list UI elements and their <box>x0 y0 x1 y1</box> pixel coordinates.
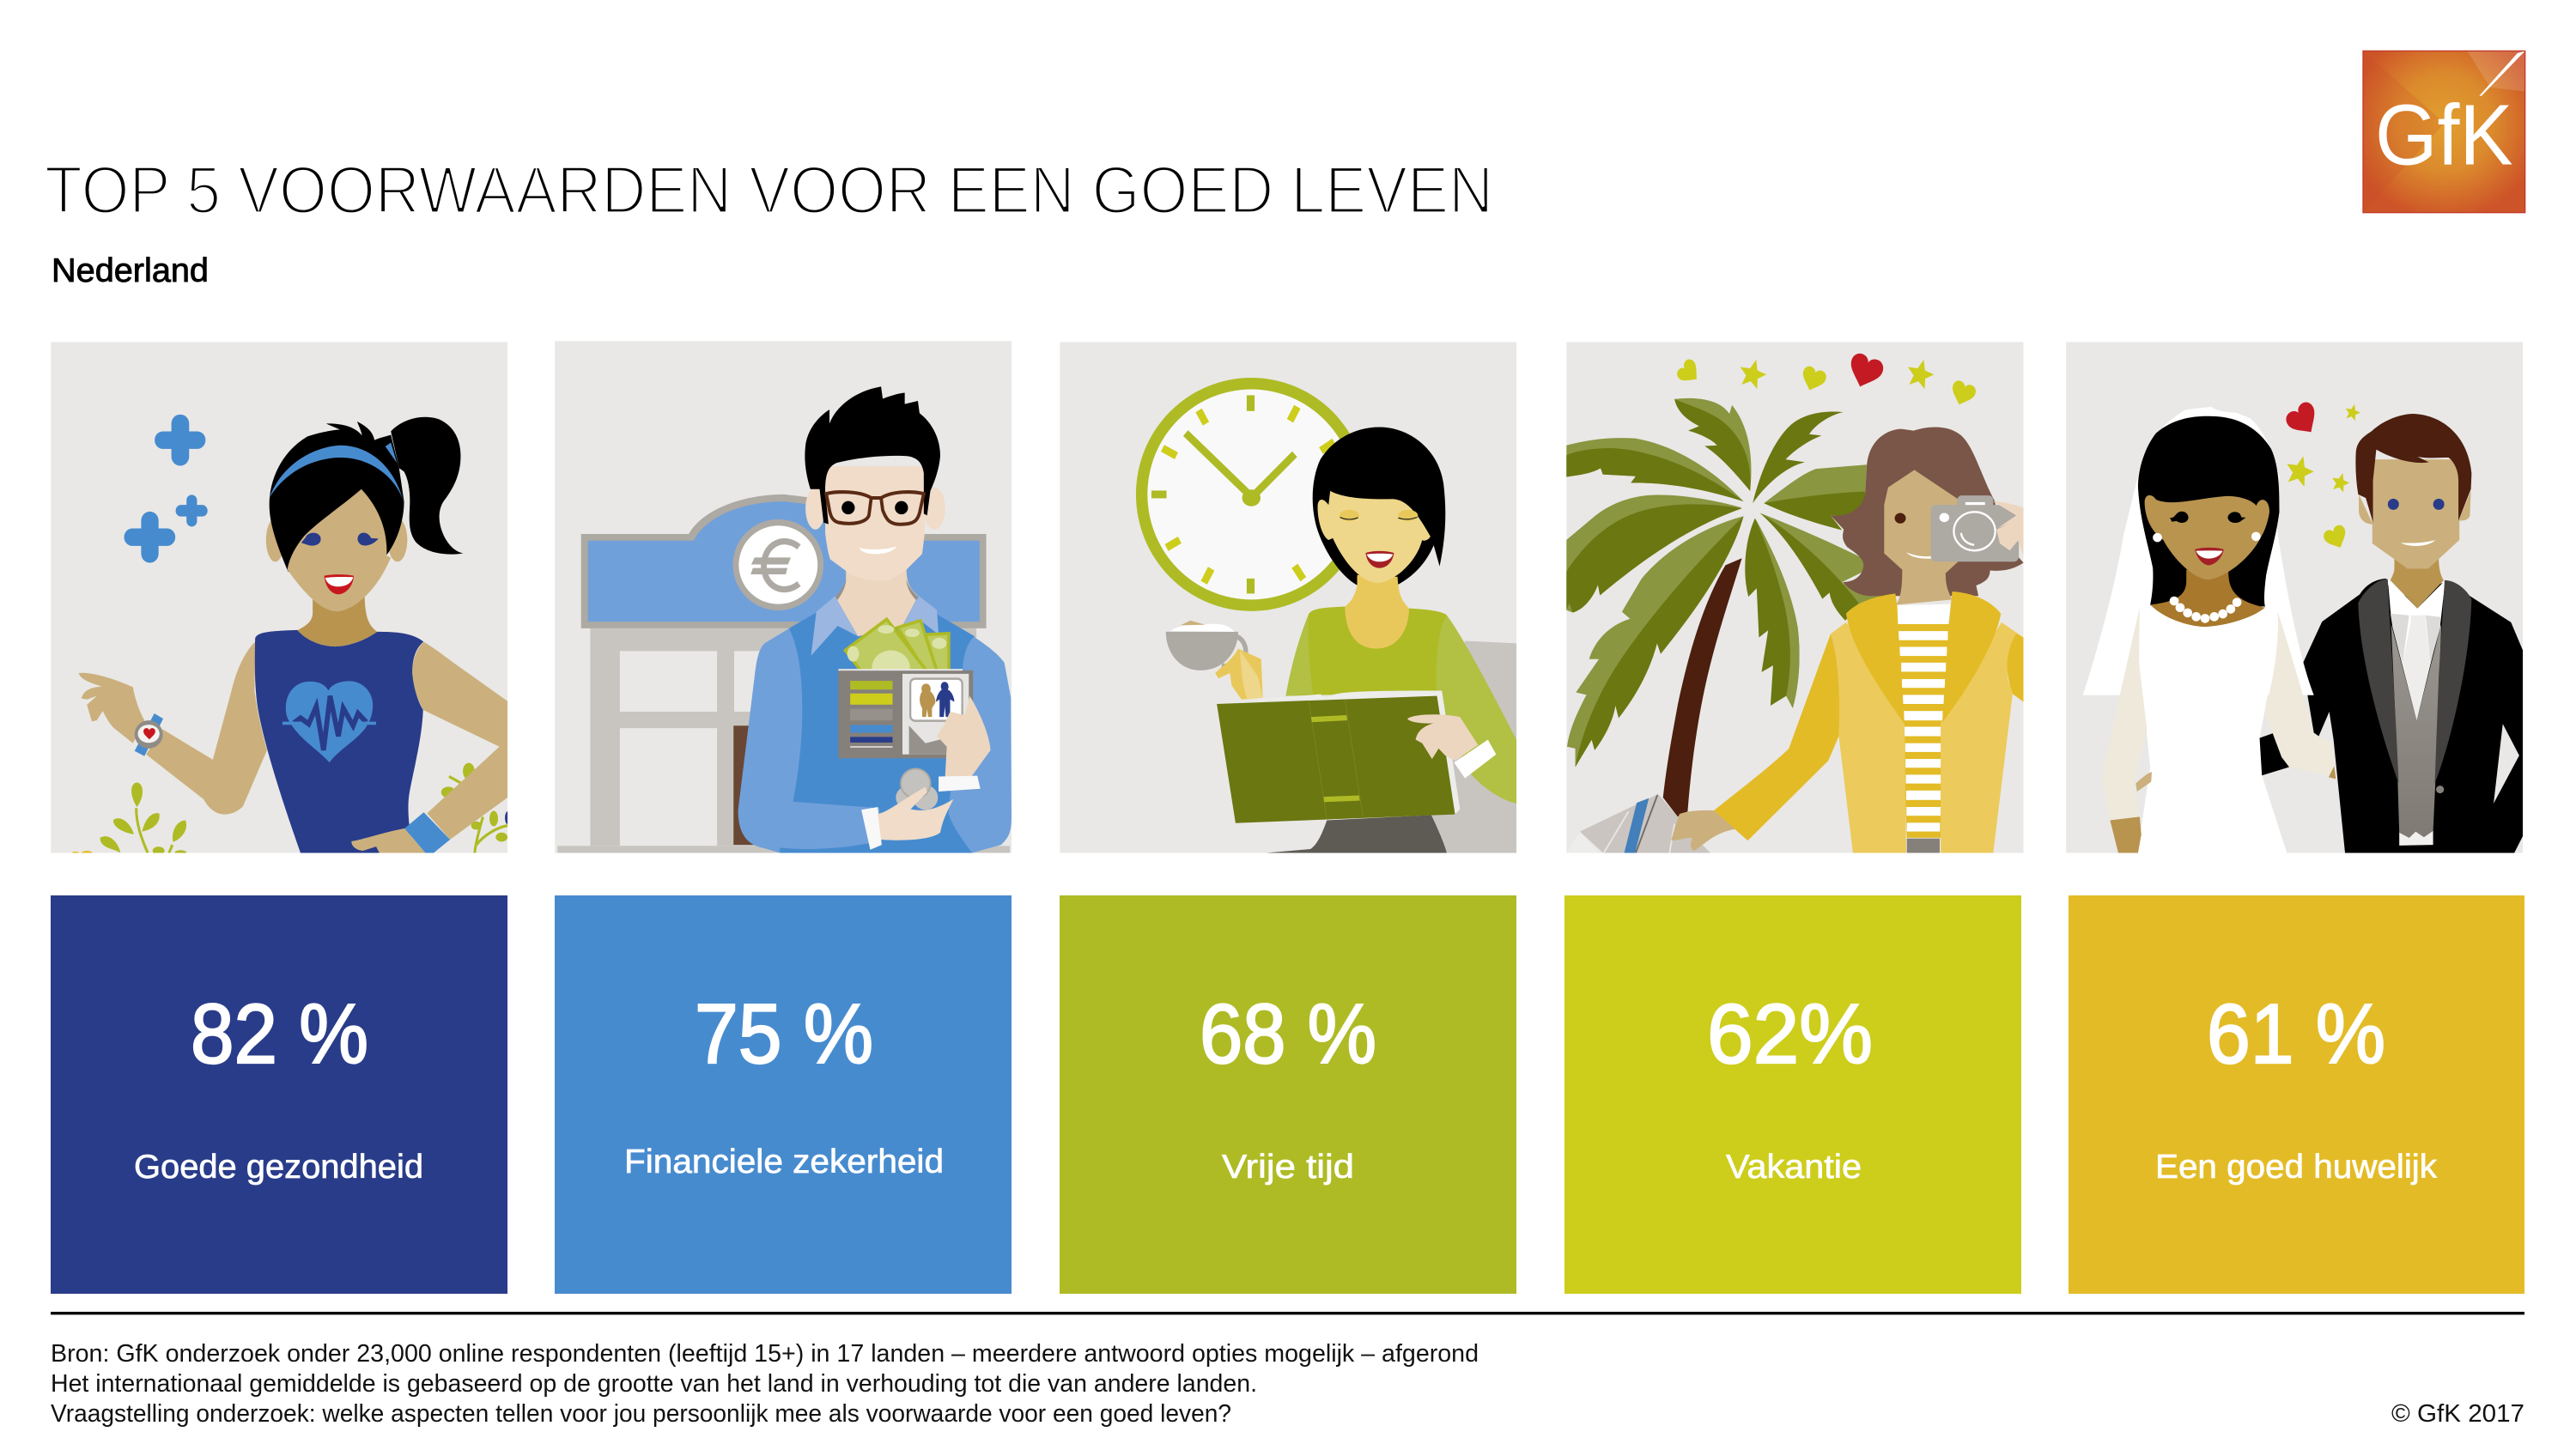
stat card: 62 percent <box>1564 895 2021 1294</box>
stat card: 61 percent <box>2069 895 2524 1294</box>
icon: clock <box>1136 378 1367 611</box>
panel: leisure illustration <box>1060 342 1516 852</box>
stat card: 61 percent: Een goed huwelijk <box>2155 1149 2438 1186</box>
stat card: 62 percent: Vakantie <box>1726 1149 1862 1186</box>
copyright: © GfK 2017 <box>2391 1400 2524 1428</box>
panel: finance illustration <box>555 341 1012 852</box>
man with wallet <box>738 386 1012 852</box>
title: TOP 5 VOORWAARDEN VOOR EEN GOED LEVEN <box>45 152 1493 228</box>
panel: health illustration <box>51 342 510 857</box>
stat card: 75 percent: Financiele zekerheid <box>624 1144 944 1180</box>
woman with camera <box>1671 427 2024 852</box>
footnote: source and method <box>51 1340 1479 1428</box>
map on the ground <box>1567 794 1710 852</box>
bride <box>2083 407 2336 852</box>
hearts and stars <box>2286 402 2360 548</box>
stat card: 68 percent: 68 % <box>1200 986 1376 1081</box>
stat card: 82 percent: Goede gezondheid <box>134 1149 423 1186</box>
stat card: 75 percent: 75 % <box>695 986 873 1081</box>
stat card: 82 percent <box>51 895 507 1294</box>
bank building <box>557 494 1010 852</box>
stat card: 68 percent <box>1060 895 1516 1294</box>
subtitle: country: Nederland <box>52 252 209 289</box>
woman with ponytail <box>79 417 507 852</box>
footnote: source and method: Bron: GfK onderzoek onder 23,000 online respondenten (leeftijd 15+) in 17 landen – meerdere antwoord opties mogelijk – afgerond <box>51 1340 1479 1368</box>
stat card: 82 percent: 82 % <box>191 986 368 1081</box>
icon: plus signs <box>124 415 208 563</box>
logo: GfK <box>2363 51 2525 213</box>
hearts and stars <box>1675 351 1978 409</box>
sofa <box>1432 641 1516 852</box>
footnote: source and method: Het internationaal gemiddelde is gebaseerd op de grootte van het land in verhouding tot die van andere landen. <box>51 1370 1257 1398</box>
plants <box>71 763 510 857</box>
panel: marriage illustration <box>2066 342 2523 852</box>
woman with book and cup <box>1166 428 1516 852</box>
stat card: 62 percent: 62% <box>1707 986 1873 1081</box>
palm tree <box>1566 398 1898 816</box>
groom <box>2259 414 2523 852</box>
panel: holiday illustration <box>1566 342 2024 852</box>
footnote: source and method: Vraagstelling onderzoek: welke aspecten tellen voor jou persoonlijk mee als voorwaarde voor een goed leven? <box>51 1400 1231 1428</box>
stat card: 68 percent: Vrije tijd <box>1222 1149 1354 1186</box>
logo: GfK: GfK <box>2375 87 2513 183</box>
stat card: 61 percent: 61 % <box>2207 986 2385 1081</box>
stat card: 75 percent <box>555 895 1012 1294</box>
